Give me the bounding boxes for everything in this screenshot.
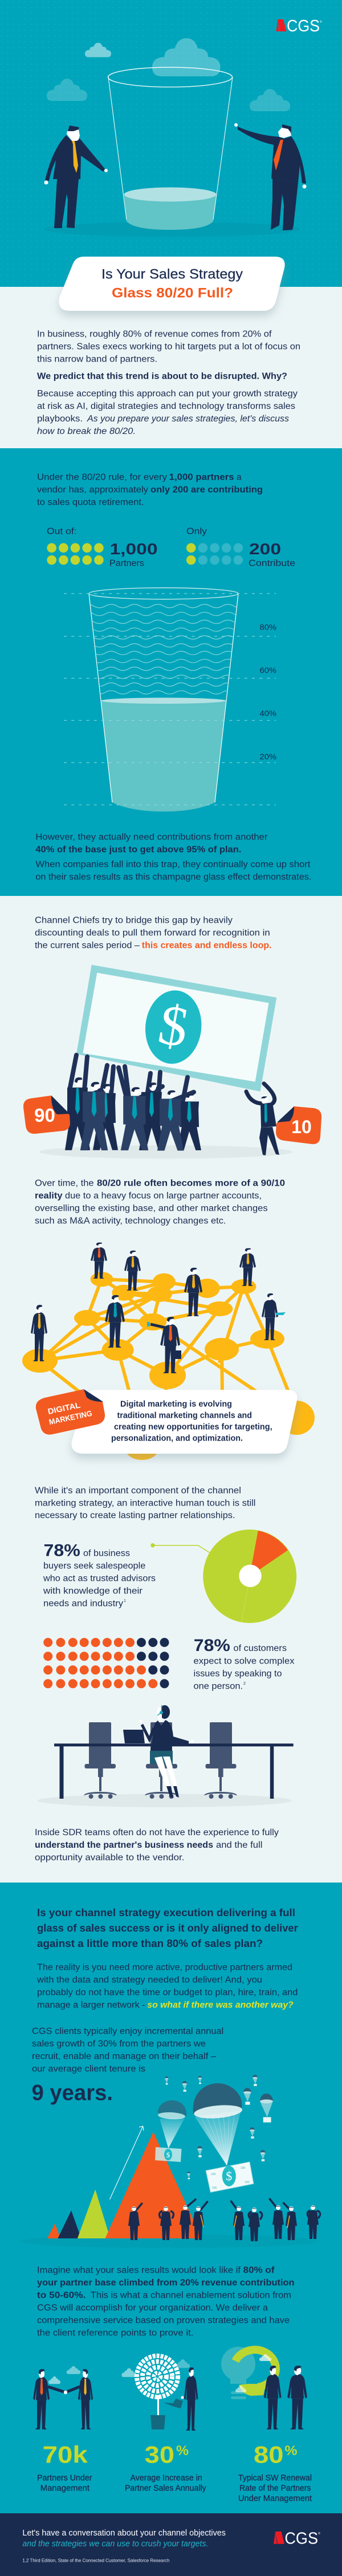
stat: 78% of customers: expect to solve complex (194, 1656, 295, 1666)
stat: 78% of business buyers: with knowledge of their (43, 1587, 142, 1596)
sticker: 90: 90 (34, 1105, 55, 1126)
clouds (47, 38, 290, 111)
donut chart with leader (150, 1530, 296, 1623)
however text: However, they actually need contributions from another (35, 832, 267, 842)
section heading: against a little more than 80% of sales plan? (37, 1937, 263, 1949)
stat: 78% of customers: issues by speaking to (194, 1669, 282, 1678)
SDR text: opportunity available to the vendor. (35, 1853, 184, 1863)
digital marketing card: traditional marketing channels and (117, 1411, 252, 1421)
company logo: ® (320, 20, 322, 24)
glass chart: 80% (260, 622, 276, 631)
half-empty glass (108, 67, 233, 230)
imagine text: your partner base climbed from 20% revenue contribution (37, 2278, 295, 2288)
icon: money tree (122, 2356, 198, 2431)
footer logo: CGS (284, 2530, 318, 2548)
call to action (22, 2528, 226, 2549)
sticker: 10: 10 (291, 1117, 312, 1137)
80/20 rule text: 1,000 partners (169, 473, 234, 482)
panel: hero (0, 0, 342, 287)
imagine text: 80% of (243, 2266, 275, 2275)
businessman left (44, 125, 108, 228)
90/10 text: overselling the existing base, and other market changes (35, 1203, 268, 1213)
stat: 80%: 80 (254, 2441, 284, 2468)
90/10 text (35, 1178, 285, 1226)
human touch text (35, 1486, 256, 1520)
intro text: We predict that this trend is about to be disrupted. Why? (37, 372, 287, 382)
imagine text: CGS will accomplish for your organization. We deliver a (37, 2303, 268, 2313)
client tenure text: our average client tenure is (32, 2064, 145, 2074)
stat: 78% of business buyers: 1 (124, 1599, 126, 1603)
80/20 rule text: a (237, 473, 242, 482)
80/20 rule text: Under the 80/20 rule, for every (37, 473, 167, 482)
stat: 200 contribute: Contribute (249, 558, 295, 568)
stat: 78% of business buyers: needs and industry (43, 1599, 123, 1609)
client tenure text (32, 2027, 223, 2105)
panel: champagne glass effect (0, 448, 342, 896)
parachutes with money: 100 (245, 2181, 250, 2184)
reality text: probably do not have the time or budget to plan, hire, train, and (37, 1987, 298, 1997)
stat: 78% of business buyers: of business (83, 1548, 130, 1558)
title card: Is Your Sales Strategy (101, 267, 243, 282)
company logo: CGS (287, 17, 320, 35)
reality text: The reality is you need more active, productive partners armed (37, 1963, 292, 1973)
client tenure text: CGS clients typically enjoy incremental annual (32, 2027, 223, 2037)
stat: 1,000 partners (47, 527, 157, 568)
stat: 30%: % (176, 2443, 189, 2459)
stat: 80% (238, 2441, 312, 2503)
people looking up (128, 2199, 320, 2241)
digital marketing card: personalization, and optimization. (111, 1434, 243, 1443)
footer logo: ® (318, 2532, 320, 2536)
crowd holding the bill (65, 1055, 201, 1151)
stat: 200 contribute: 200 (249, 540, 281, 558)
ground shadow (39, 1145, 292, 1159)
dollar bill: $ (154, 992, 193, 1060)
imagine text: comprehensive service based on proven strategies and have (37, 2316, 290, 2326)
dollar bill (76, 965, 276, 1092)
parachutes with money: 100 (241, 2167, 246, 2170)
80/20 rule text: only 200 are contributing (150, 485, 263, 495)
parachutes with money: $ (166, 2151, 170, 2159)
stat: 30%: Partner Sales Annually (125, 2484, 206, 2493)
channel chiefs text: Channel Chiefs try to bridge this gap by heavily (35, 916, 233, 926)
client tenure text: recruit, enable and manage on their behalf – (32, 2052, 216, 2062)
intro text: how to break the 80/20. (37, 427, 136, 436)
SDR text: and the full (216, 1840, 262, 1850)
intro text: Because accepting this approach can put your growth strategy (37, 389, 298, 399)
intro text: playbooks. (37, 414, 83, 424)
stat: 200 contribute: Only (186, 527, 207, 537)
stat: 78% of business buyers: who act as trusted advisors (43, 1574, 156, 1584)
reality text (36, 1963, 298, 2010)
however text (35, 832, 311, 882)
channel chiefs text (35, 916, 271, 951)
network illustration (22, 1243, 315, 1460)
glass chart: 40% (260, 709, 276, 718)
90/10 text: such as M&A activity, technology changes etc. (35, 1216, 226, 1226)
businessman right (234, 123, 307, 230)
call to action: Let's have a conversation about your channel objectives (22, 2528, 226, 2538)
section heading (37, 1906, 298, 1949)
stat: 1,000 partners: Out of: (47, 527, 77, 537)
stat: 30%: 30 (145, 2441, 174, 2468)
sticker: 90 (23, 1096, 70, 1134)
stat: 70k: 70k (43, 2441, 88, 2468)
parachutes with money: 100 (211, 2173, 216, 2176)
intro text: In business, roughly 80% of revenue comes from 20% of (37, 330, 272, 339)
imagine text: Imagine what your sales results would look like if (37, 2266, 241, 2275)
stat: 30%: Average Increase in (130, 2473, 202, 2482)
stat: 80%: % (284, 2443, 298, 2459)
80/20 rule text: to sales quota retirement. (37, 498, 144, 508)
glass chart (64, 588, 276, 812)
90/10 text: reality (35, 1191, 63, 1200)
mountains (47, 2132, 202, 2238)
SDR text: Inside SDR teams often do not have the experience to fully (35, 1828, 279, 1837)
title card (59, 257, 285, 311)
digital marketing sticker: MARKETING (48, 1409, 93, 1426)
stat: 78% of business buyers: buyers seek salespeople (43, 1561, 145, 1571)
human touch text: necessary to create lasting partner relationships. (35, 1511, 235, 1520)
90/10 text: 80/20 rule often becomes more of a 90/10 (97, 1178, 285, 1188)
glass chart: 20% (260, 752, 276, 761)
panel: light body (0, 896, 342, 1883)
digital marketing sticker: DIGITAL (47, 1400, 82, 1416)
stat: 78% of business buyers (43, 1541, 156, 1609)
section heading: glass of sales success or is it only aligned to deliver (37, 1922, 298, 1934)
intro text (37, 330, 300, 436)
stat: 78% of customers: of customers (234, 1644, 287, 1653)
stat: 78% of customers: one person. (194, 1681, 243, 1691)
stat: 78% of customers (194, 1636, 295, 1691)
human touch text: While it's an important component of the channel (35, 1486, 241, 1495)
80/20 rule text (37, 473, 263, 508)
human touch text: marketing strategy, an interactive human touch is still (35, 1498, 256, 1508)
intro text: at risk as AI, digital strategies and technology transforms sales (37, 401, 295, 411)
channel chiefs text: discounting deals to pull them forward for recognition in (35, 928, 270, 938)
title card: Glass 80/20 Full? (112, 286, 233, 301)
stat: 78% of business buyers: 78% (43, 1541, 80, 1560)
stat: 78% of customers: 2 (243, 1682, 246, 1686)
stat: 80%: Typical SW Renewal (238, 2473, 312, 2482)
panel: footer (0, 2513, 342, 2576)
intro text: partners. Sales execs working to hit targets put a lot of focus on (37, 342, 300, 352)
imagine text: This is what a channel enablement solution from (91, 2291, 291, 2301)
intro text: As you prepare your sales strategies, let's discuss (87, 414, 289, 424)
channel chiefs text: the current sales period – (35, 941, 140, 951)
dot grid chart (43, 1638, 169, 1688)
panel: intro (0, 257, 342, 448)
channel chiefs text: this creates and endless loop. (142, 941, 271, 951)
parachutes with money (155, 2075, 273, 2192)
sticker: 10 (276, 1106, 321, 1144)
reality text: with the data and strategy needed to deliver! And, you (36, 1975, 262, 1985)
stat: 200 contribute (186, 527, 295, 568)
icon: idea bulb (221, 2347, 307, 2429)
stat: 78% of customers: 78% (194, 1636, 230, 1655)
digital marketing card (72, 1390, 297, 1454)
section heading: Is your channel strategy execution delivering a full (37, 1906, 295, 1918)
ground shadow (20, 2234, 319, 2248)
stat: 80%: Under Management (238, 2494, 312, 2503)
call to action: and the strategies we can use to crush your targets. (22, 2539, 208, 2549)
digital marketing card: creating new opportunities for targeting, (114, 1423, 272, 1432)
desk illustration (38, 1705, 294, 1807)
90/10 text: due to a heavy focus on large partner accounts, (65, 1191, 262, 1200)
parachutes with money: $ (226, 2169, 232, 2183)
imagine text (37, 2266, 295, 2338)
man on the right (246, 1084, 279, 1155)
SDR text (35, 1828, 279, 1863)
stat: 30% (125, 2441, 206, 2493)
stat: 1,000 partners: 1,000 (109, 540, 157, 558)
SDR text: understand the partner's business needs (35, 1840, 213, 1850)
however text: 40% of the base just to get above 95% of plan. (35, 845, 241, 854)
stat: 1,000 partners: Partners (109, 558, 144, 568)
however text: on their sales results as this champagne glass effect demonstrates. (35, 873, 311, 882)
digital marketing card: Digital marketing is evolving (120, 1400, 232, 1409)
digital marketing sticker (36, 1389, 105, 1435)
imagine text: the client reference points to prove it. (37, 2328, 193, 2338)
80/20 rule text: vendor has, approximately (37, 485, 148, 495)
client tenure text: 9 years. (32, 2080, 113, 2105)
stat: 80%: Rate of the Partners (239, 2484, 311, 2493)
ground shadow (44, 222, 300, 237)
panel: full glass of sales success (0, 1883, 342, 2513)
however text: When companies fall into this trap, they continually come up short (35, 860, 311, 870)
reality text: so what if there was another way? (147, 2000, 294, 2010)
icon: handshake (33, 2366, 93, 2429)
intro text: this narrow band of partners. (37, 355, 157, 364)
parachutes with money: 100 (212, 2186, 217, 2190)
imagine text: to 50-60%. (37, 2291, 85, 2301)
stat: 70k: Management (40, 2484, 89, 2493)
glass chart: 60% (260, 666, 276, 675)
arrow (109, 2126, 144, 2200)
90/10 text: Over time, the (35, 1178, 94, 1188)
stat: 70k: Partners Under (37, 2473, 92, 2482)
footnote: 1,2 Third Edition, State of the Connected Customer, Salesforce Research (22, 2558, 170, 2563)
client tenure text: sales growth of 30% from the partners we (32, 2039, 206, 2049)
reality text: manage a larger network - (37, 2000, 145, 2010)
stat: 70k (37, 2441, 92, 2493)
